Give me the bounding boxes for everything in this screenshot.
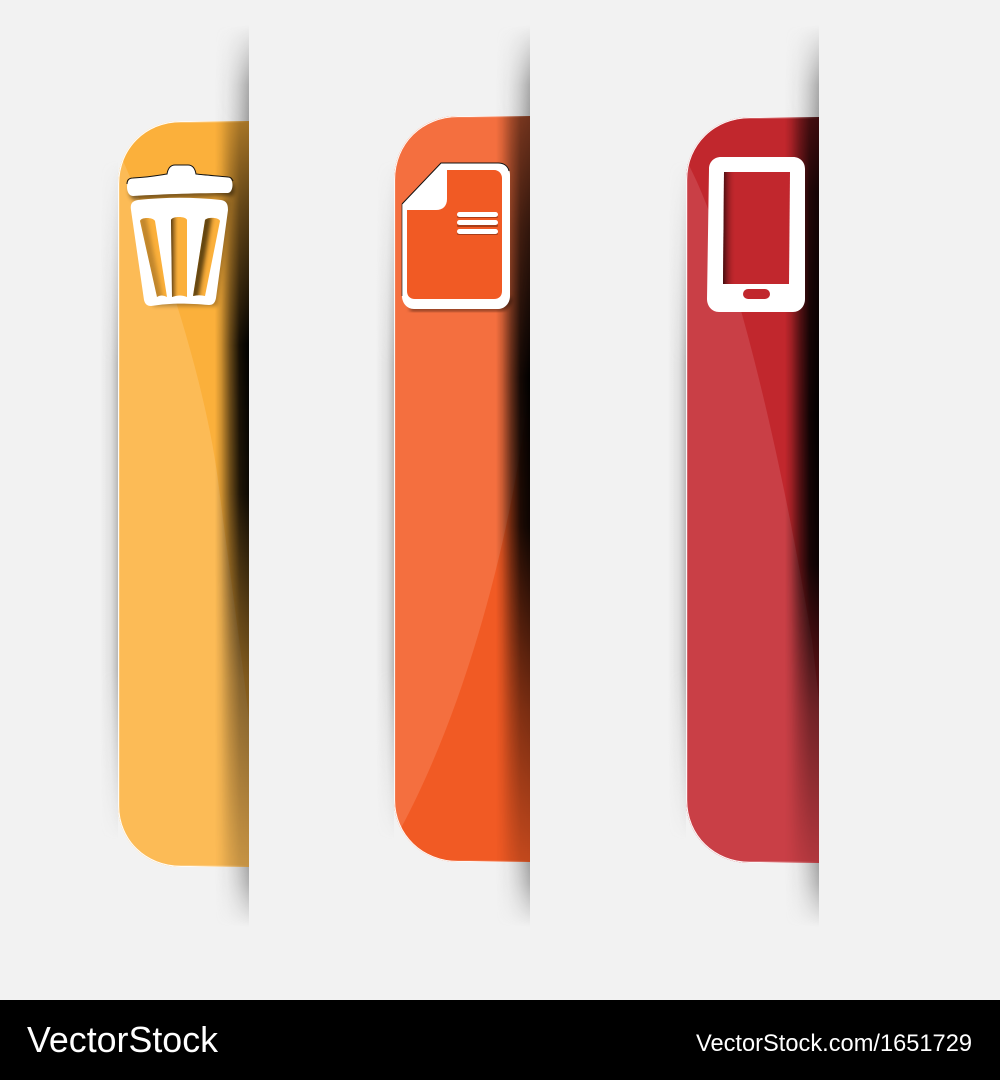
footer bar — [0, 1000, 1000, 1080]
icon: trash can — [127, 165, 234, 306]
panel: yellow tab — [118, 121, 249, 867]
footer image id: VectorStock.com/1651729 — [696, 1030, 972, 1057]
footer brand: VectorStock — [27, 1019, 219, 1060]
panel: orange tab — [394, 116, 530, 862]
panel: red tab — [686, 117, 819, 863]
slit shadows — [215, 25, 819, 929]
glossy highlight — [118, 150, 249, 867]
tab left edge shadows — [100, 160, 686, 840]
icon: smartphone — [707, 157, 805, 312]
icon: document — [402, 163, 510, 309]
glossy highlight — [394, 116, 530, 840]
glossy highlight — [686, 160, 819, 863]
